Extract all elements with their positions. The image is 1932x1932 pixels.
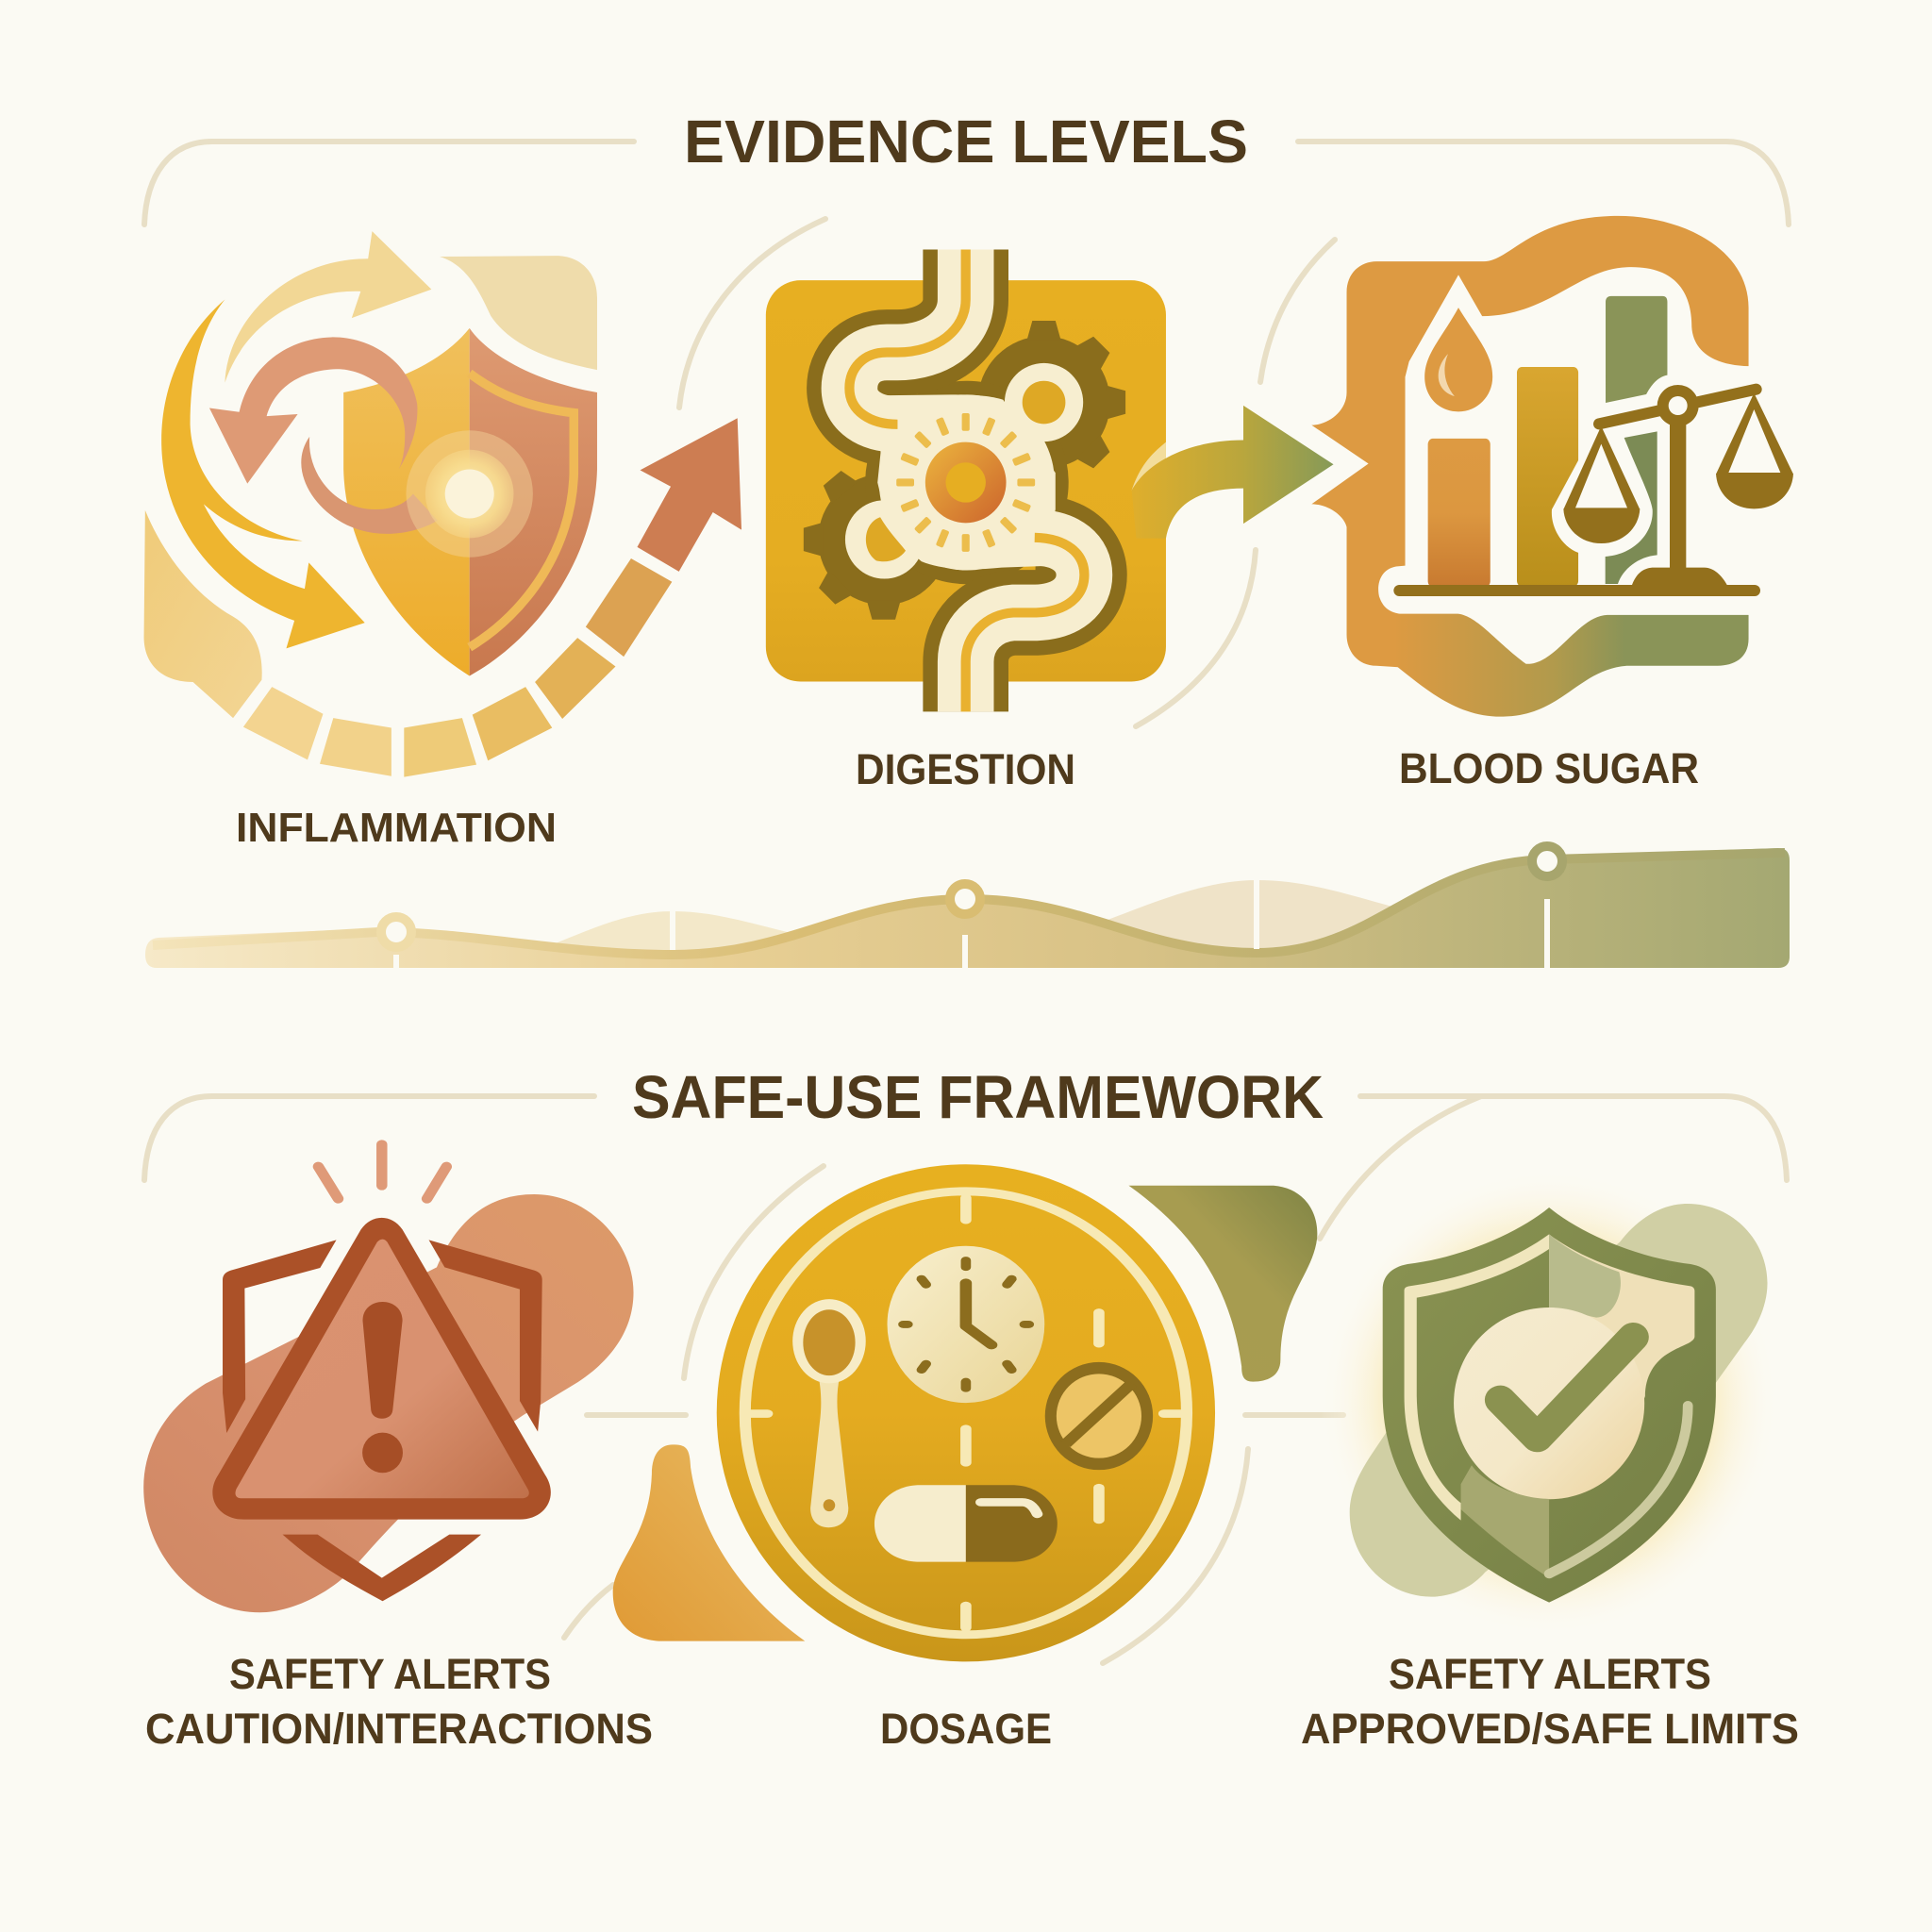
marker: digestion xyxy=(950,884,980,914)
label: dosage: DOSAGE xyxy=(880,1705,1052,1753)
alert rays xyxy=(318,1144,446,1199)
check mark xyxy=(1500,1337,1633,1438)
arrow: digestion to blood sugar xyxy=(1132,406,1334,539)
right accent blob xyxy=(1128,1186,1317,1382)
spoon xyxy=(792,1299,866,1527)
capsule xyxy=(874,1485,1058,1562)
broken shield outline xyxy=(223,1240,542,1601)
section: evidence levels frame xyxy=(144,142,1789,726)
icon: safe limits shield with check xyxy=(1320,1170,1778,1635)
gears xyxy=(804,321,1125,620)
chart: evidence level wave timeline xyxy=(145,846,1790,969)
balance scale xyxy=(1399,385,1793,591)
label: safety alerts approved xyxy=(1301,1650,1799,1753)
icon: blood sugar bars, drop and scale xyxy=(1311,216,1793,717)
progress path segments and arrow xyxy=(243,418,741,777)
digestive core sun xyxy=(896,413,1035,552)
clock xyxy=(888,1246,1044,1403)
marker: blood sugar xyxy=(1532,846,1562,876)
label: digestion: DIGESTION xyxy=(856,745,1075,793)
label: inflammation: INFLAMMATION xyxy=(236,805,557,851)
label: blood sugar: BLOOD SUGAR xyxy=(1399,744,1699,792)
label: safety alerts caution: SAFETY ALERTS xyxy=(229,1650,551,1698)
label: safety alerts approved: SAFETY ALERTS xyxy=(1389,1650,1711,1698)
tablet with score line xyxy=(1045,1362,1153,1470)
label: safety alerts caution xyxy=(145,1650,653,1753)
icon: caution triangle xyxy=(143,1144,634,1612)
heading: evidence levels: EVIDENCE LEVELS xyxy=(684,108,1248,175)
icon: inflammation shield with cycle arrows xyxy=(144,231,741,777)
icon: digestion intestine and gears xyxy=(766,249,1166,711)
left accent blob xyxy=(613,1444,805,1641)
warning triangle xyxy=(212,1218,551,1520)
icon: dosage dial xyxy=(613,1164,1317,1661)
label: safety alerts caution: CAUTION/INTERACTIONS xyxy=(145,1705,653,1753)
stage dividers xyxy=(396,880,1547,969)
marker: inflammation xyxy=(381,917,411,947)
heading: safe-use framework: SAFE-USE FRAMEWORK xyxy=(632,1063,1324,1131)
label: safety alerts approved: APPROVED/SAFE LIMITS xyxy=(1301,1705,1799,1753)
section: safe-use framework frame xyxy=(144,1096,1787,1663)
